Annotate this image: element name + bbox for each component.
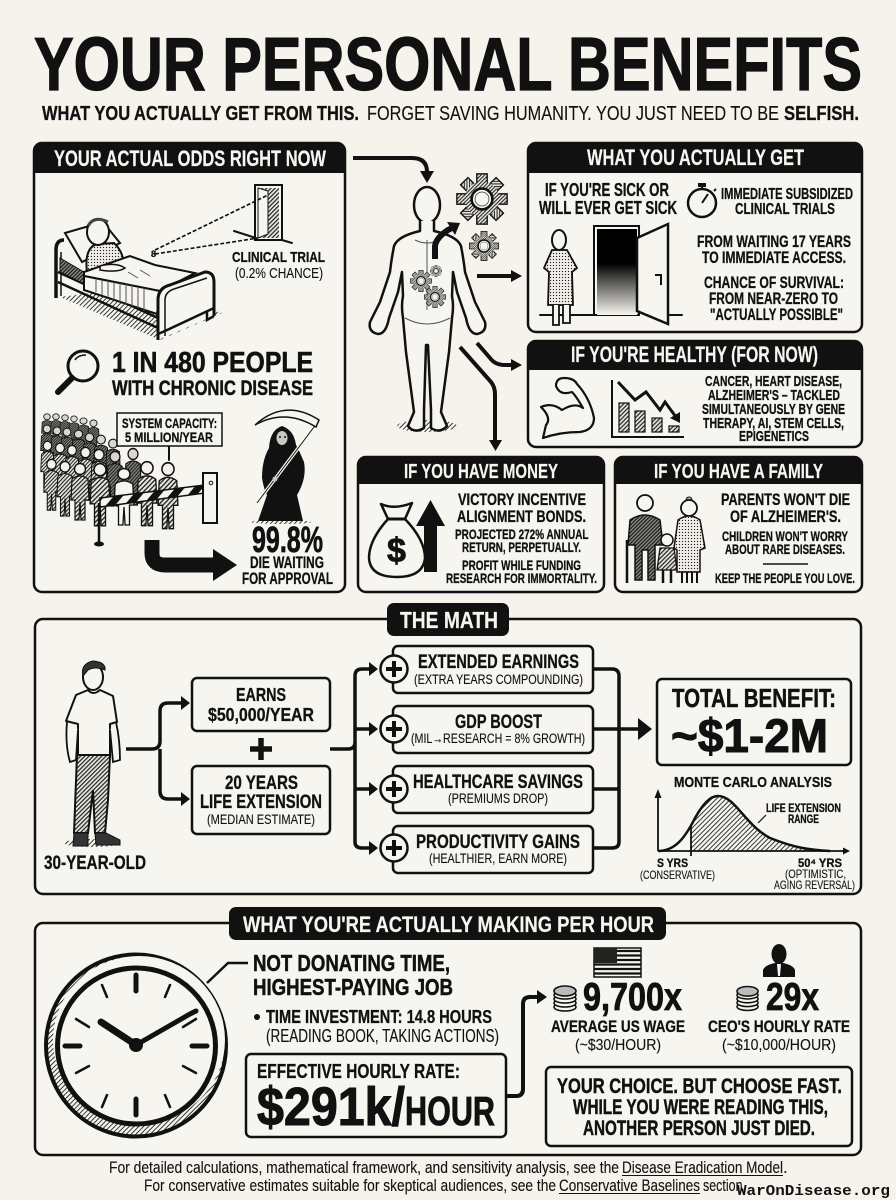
text: bonds <box>446 490 597 586</box>
box: earns: EARNS <box>236 685 286 705</box>
arrows: person to inputs <box>126 696 190 806</box>
box: gdp boost: (MIL→RESEARCH = 8% GROWTH) <box>411 731 585 746</box>
label: if you're sick: WILL EVER GET SICK <box>539 198 677 218</box>
box: effective hourly rate: EFFECTIVE HOURLY RATE: <box>257 1061 460 1083</box>
text: family benefits: ABOUT RARE DISEASES. <box>725 541 845 557</box>
text: bonds: VICTORY INCENTIVE <box>458 490 586 509</box>
icon: barrier gate <box>94 473 217 546</box>
label: if you're sick <box>539 180 677 218</box>
icon: flexed arm <box>541 378 594 438</box>
text: diseases tackled: EPIGENETICS <box>739 429 809 445</box>
box: gdp boost <box>380 706 593 753</box>
text: not donating time: HIGHEST-PAYING JOB <box>253 974 453 1000</box>
stat: 29x: 29x <box>766 976 819 1019</box>
text: from waiting: FROM NEAR-ZERO TO <box>709 289 838 308</box>
chart: monte carlo distribution: LIFE EXTENSION <box>766 803 841 815</box>
icon: human body with gears <box>370 174 507 432</box>
label: immediate trials <box>721 186 853 218</box>
icon: 30-year-old man <box>64 661 120 847</box>
subtitle: FORGET SAVING HUMANITY. YOU JUST NEED TO BE <box>367 103 779 125</box>
icon: up arrow <box>416 500 445 572</box>
arrow: to money <box>460 347 502 451</box>
box: effective hourly rate: $291k/ <box>257 1077 405 1137</box>
text: diseases tackled: CANCER, HEART DISEASE, <box>705 374 842 390</box>
panel header: healthy <box>528 341 862 370</box>
chart: monte carlo distribution: (CONSERVATIVE) <box>640 868 715 882</box>
box: effective hourly rate: HOUR <box>405 1088 495 1134</box>
arrows: inputs to benefits <box>330 662 378 855</box>
label: immediate trials: CLINICAL TRIALS <box>735 201 835 218</box>
box: life extension: 20 YEARS <box>225 773 298 794</box>
text: time investment: TIME INVESTMENT: 14.8 HOURS <box>266 1007 492 1027</box>
callout: your choice <box>546 1067 852 1146</box>
text: time investment <box>254 1007 499 1046</box>
stat: 1 in 480: WITH CHRONIC DISEASE <box>112 377 313 400</box>
stat: 9,700x: 9,700x <box>583 976 682 1019</box>
footer note: Disease Eradication Model <box>622 1158 783 1177</box>
stat: 1 in 480 <box>112 347 313 400</box>
leader line: clock to text <box>207 963 248 983</box>
icon: stopwatch <box>688 183 716 217</box>
stat: 99.8% <box>242 519 333 588</box>
stat: 1 in 480: 1 IN 480 PEOPLE <box>112 347 313 379</box>
text: diseases tackled: ALZHEIMER'S – TACKLED <box>708 388 840 404</box>
box: productivity gains <box>380 826 593 873</box>
text: family benefits: PARENTS WON'T DIE <box>721 490 850 509</box>
callout: your choice: ANOTHER PERSON JUST DIED. <box>583 1117 815 1140</box>
panel: if you have money <box>358 457 604 592</box>
arrow: into body <box>353 158 434 183</box>
panel: if you're healthy <box>528 341 862 447</box>
stat: 9,700x: (~$30/HOUR) <box>575 1037 661 1054</box>
box: productivity gains: (HEALTHIER, EARN MORE) <box>429 851 567 866</box>
label: system capacity: 5 MILLION/YEAR <box>125 430 213 445</box>
text: from waiting <box>697 232 851 324</box>
text: diseases tackled: SIMULTANEOUSLY BY GENE <box>702 402 845 418</box>
panel header: odds <box>34 143 345 173</box>
box: healthcare savings: HEALTHCARE SAVINGS <box>413 772 583 793</box>
stat: 99.8%: FOR APPROVAL <box>242 569 333 588</box>
text: diseases tackled: THERAPY, AI, STEM CELLS, <box>703 416 844 432</box>
icon: plus <box>250 738 272 760</box>
box: healthcare savings: (PREMIUMS DROP) <box>448 791 548 806</box>
arrow: rate to comparison <box>506 990 547 1096</box>
heading: per hour: WHAT YOU'RE ACTUALLY MAKING PER HOUR <box>243 912 654 937</box>
box: earns: $50,000/YEAR <box>208 705 314 725</box>
box: total benefit: TOTAL BENEFIT: <box>672 683 836 713</box>
box: healthcare savings <box>380 766 593 813</box>
chart: monte carlo distribution: (OPTIMISTIC, <box>785 867 846 881</box>
chart: monte carlo distribution: S YRS <box>657 856 688 870</box>
chart: monte carlo distribution: MONTE CARLO ANALYSIS <box>674 774 832 791</box>
text: family benefits: CHILDREN WON'T WORRY <box>722 528 848 544</box>
text: bonds: PROFIT WHILE FUNDING <box>462 557 581 573</box>
heading: the math: THE MATH <box>400 607 498 633</box>
panel: if you have a family <box>615 457 862 592</box>
stat: 29x: (~$10,000/HOUR) <box>722 1037 836 1054</box>
icon: distant door <box>151 185 292 259</box>
box: extended earnings: (EXTRA YEARS COMPOUNDING) <box>414 672 583 687</box>
box: total benefit <box>657 679 851 765</box>
icon: wall clock <box>46 954 226 1136</box>
heading: per hour <box>229 907 666 940</box>
arrow: to healthy <box>477 343 522 371</box>
box: life extension: LIFE EXTENSION <box>200 792 322 813</box>
arrow: to what you get <box>477 270 522 282</box>
icon: money bag <box>369 503 425 577</box>
text: time investment: (READING BOOK, TAKING ACTIONS) <box>266 1026 499 1046</box>
icon: money bag: $ <box>387 532 406 570</box>
footer note: Conservative Baselines <box>559 1176 700 1195</box>
label: system capacity <box>117 413 222 460</box>
text: family benefits: OF ALZHEIMER'S. <box>730 507 841 526</box>
chart: monte carlo distribution: AGING REVERSAL) <box>774 878 855 892</box>
panel: hourly earnings <box>35 907 861 1155</box>
text: bonds: RETURN, PERPETUALLY. <box>462 539 581 555</box>
footer note: For detailed calculations, mathematical framework, and sensitivity analysis, see the <box>109 1158 619 1177</box>
stat: 99.8%: 99.8% <box>252 519 323 560</box>
box: gdp boost: GDP BOOST <box>455 712 542 733</box>
panel: what you actually get <box>528 143 862 332</box>
icon: family of three <box>627 495 705 583</box>
box: life extension: (MEDIAN ESTIMATE) <box>207 811 315 827</box>
label: clinical trial <box>232 249 325 282</box>
stat: 29x: CEO'S HOURLY RATE <box>708 1017 850 1036</box>
icon: hospital bed with patient <box>56 219 222 340</box>
box: earns <box>192 678 330 731</box>
icon: ceo silhouette <box>763 944 795 977</box>
stat: 29x <box>708 976 850 1054</box>
stat: 9,700x <box>551 976 685 1054</box>
watermark: WarOnDisease.org <box>737 1183 890 1200</box>
panel header: family <box>615 457 862 484</box>
box: life extension <box>192 766 330 834</box>
subtitle: WHAT YOU ACTUALLY GET FROM THIS. <box>42 103 359 125</box>
text: bonds: ALIGNMENT BONDS. <box>457 507 586 526</box>
icon: crowd queue <box>41 414 178 529</box>
footer note <box>109 1158 788 1195</box>
text: bonds: RESEARCH FOR IMMORTALITY. <box>446 570 597 586</box>
subtitle <box>42 103 859 125</box>
footer note: section. <box>703 1176 746 1195</box>
box: effective hourly rate <box>246 1054 506 1137</box>
panel header: family: IF YOU HAVE A FAMILY <box>654 461 824 483</box>
text: not donating time: NOT DONATING TIME, <box>253 950 450 976</box>
label: 30-year-old: 30-YEAR-OLD <box>44 853 146 874</box>
icon: patient in gown <box>540 230 682 325</box>
box: total benefit: ~$1-2M <box>671 709 828 762</box>
chart: monte carlo distribution: RANGE <box>788 814 819 826</box>
text: not donating time <box>253 950 453 1000</box>
label: if you're sick: IF YOU'RE SICK OR <box>545 180 669 200</box>
footer note: . <box>783 1158 788 1177</box>
icon: us flag <box>594 948 641 977</box>
panel: your actual odds <box>34 143 345 592</box>
text: from waiting: CHANCE OF SURVIVAL: <box>704 273 844 292</box>
icon: distant door: 8 <box>151 249 156 259</box>
panel header: money <box>358 457 604 484</box>
arrow: queue to deaths <box>152 540 237 581</box>
panel header: odds: YOUR ACTUAL ODDS RIGHT NOW <box>54 146 326 171</box>
label: clinical trial: CLINICAL TRIAL <box>232 249 325 266</box>
text: diseases tackled <box>702 374 845 445</box>
chart: declining bars <box>612 380 684 437</box>
stat: 9,700x: AVERAGE US WAGE <box>551 1017 685 1036</box>
text: family benefits <box>715 490 855 586</box>
box: extended earnings <box>380 646 593 693</box>
heading: the math <box>387 603 509 636</box>
panel header: what you get: WHAT YOU ACTUALLY GET <box>587 145 804 170</box>
box: productivity gains: PRODUCTIVITY GAINS <box>416 832 580 853</box>
box: extended earnings: EXTENDED EARNINGS <box>418 652 579 673</box>
subtitle: SELFISH. <box>784 103 859 125</box>
footer note: For conservative estimates suitable for skeptical audiences, see the <box>144 1176 556 1195</box>
panel: the math <box>35 603 861 894</box>
label: clinical trial: (0.2% CHANCE) <box>235 265 323 282</box>
chart: monte carlo distribution <box>640 774 855 892</box>
label: system capacity: SYSTEM CAPACITY: <box>122 416 217 431</box>
chart: monte carlo distribution: 50⁴ YRS <box>798 856 842 870</box>
icon: magnifier <box>58 351 98 392</box>
panel header: what you get <box>528 143 862 173</box>
arrows: benefits to total <box>593 669 652 848</box>
panel header: money: IF YOU HAVE MONEY <box>404 461 558 483</box>
text: bonds: PROJECTED 272% ANNUAL <box>455 526 589 542</box>
icon: grim reaper <box>251 410 319 524</box>
icon: open door <box>594 224 668 324</box>
stat: 99.8%: DIE WAITING <box>250 553 324 572</box>
